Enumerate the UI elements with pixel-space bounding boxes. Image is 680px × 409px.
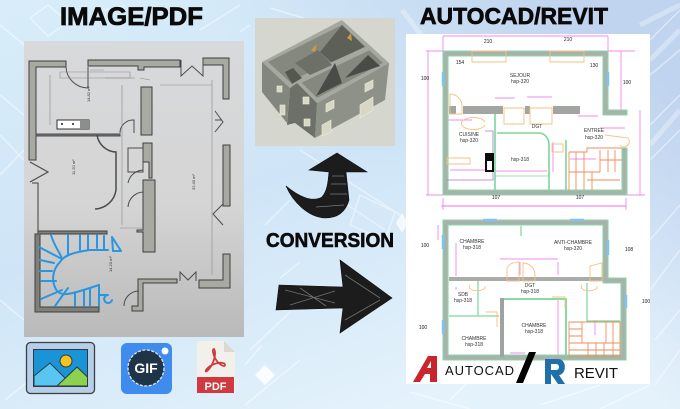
first floor room labels: hsp-318 [521, 289, 539, 295]
first floor room labels: CHAMBRE [459, 239, 485, 245]
ground floor plan [421, 36, 645, 210]
interior partitions and door swings [30, 60, 223, 306]
logo: AutoCAD: AUTOCAD [445, 363, 514, 378]
first floor dimensions text: 100 [421, 243, 429, 249]
ground floor dimensions text: 107 [492, 195, 500, 201]
first floor stairs [569, 322, 620, 356]
first floor dimensions text [419, 243, 650, 331]
logo: AutoCAD [413, 356, 514, 382]
ground floor dimensions text: 130 [590, 63, 598, 69]
icon: image file [26, 342, 94, 394]
divider slash [516, 352, 536, 383]
first floor room labels: DGT [525, 283, 535, 289]
first floor room labels: hsp-318 [525, 329, 543, 335]
windows and doors [277, 80, 373, 136]
ground floor partitions [449, 106, 580, 190]
plan labels: 32.40 m² [191, 174, 196, 190]
house right facade [315, 63, 389, 138]
first floor room labels: hsp-318 [463, 245, 481, 251]
ground floor stairs [569, 148, 622, 190]
first floor room labels: ANTI-CHAMBRE [554, 240, 593, 246]
ground floor room labels: CUISINE [459, 132, 480, 138]
plan labels: 14.20 m² [108, 256, 113, 272]
title: AUTOCAD/REVIT: AUTOCAD/REVIT [420, 3, 608, 29]
arrow: curved up arrow [286, 153, 367, 218]
kitchen sink [57, 120, 89, 129]
first floor dimensions text: 100 [419, 325, 427, 331]
first floor dimensions text: 100 [642, 299, 650, 305]
blue hand-drawn staircase [39, 235, 121, 306]
panel: 3D house model [255, 18, 395, 146]
ground floor dimensions text: 100 [421, 76, 429, 82]
ground floor dimension lines [426, 36, 645, 210]
ground floor room labels: ENTREE [584, 128, 605, 134]
icon: PDF file: PDF [204, 381, 227, 393]
plan labels: 11.20 m² [71, 159, 76, 175]
house top of walls [262, 20, 389, 103]
first floor room labels: hsp-318 [454, 298, 472, 304]
first floor partitions [449, 226, 620, 357]
first floor room labels [454, 239, 593, 348]
house interior rooms [268, 25, 383, 98]
logo: Revit: REVIT [574, 365, 618, 382]
plan labels [71, 86, 196, 272]
ground floor dimensions text: 154 [456, 60, 464, 66]
ground floor dimensions text: 210 [564, 37, 572, 43]
first floor room labels: SDB [458, 292, 469, 298]
icon: GIF file [121, 343, 172, 394]
first floor dimensions text: 108 [625, 247, 633, 253]
plan labels: 14.82 m² [86, 86, 91, 102]
ground floor room labels: hsp-318 [511, 157, 529, 163]
panel: CAD drawings sheet [406, 34, 650, 384]
first floor room labels: hsp-318 [465, 342, 483, 348]
outer walls of hand-marked plan [29, 58, 230, 312]
ground floor walls [443, 51, 627, 195]
ground floor dimensions text [421, 37, 631, 201]
ground floor dimensions text: 107 [576, 195, 584, 201]
first floor room labels: CHAMBRE [461, 336, 487, 342]
arrow: right arrow [276, 260, 392, 333]
ground floor room labels: hsp-320 [585, 135, 603, 141]
title: IMAGE/PDF: IMAGE/PDF [60, 3, 203, 31]
first floor room labels: hsp-320 [564, 246, 582, 252]
label: CONVERSION: CONVERSION [266, 230, 394, 252]
ground floor dimensions text: 210 [484, 39, 492, 45]
icon: PDF file [197, 341, 235, 393]
first floor doors and windows [469, 262, 602, 327]
ground floor room labels: SEJOUR [510, 73, 531, 79]
house left facade [262, 62, 290, 123]
first floor plan [419, 206, 650, 360]
first floor walls [443, 220, 626, 360]
ground floor room labels: hsp-320 [511, 79, 529, 85]
kitchen counter [447, 131, 494, 180]
panel: scanned floor plan photo [24, 41, 244, 337]
first floor room labels: CHAMBRE [521, 323, 547, 329]
icon: GIF file: GIF [134, 360, 158, 376]
ground floor dimensions text: 100 [623, 80, 631, 86]
ground floor room labels: hsp-320 [460, 138, 478, 144]
ground floor room labels: DGT [532, 124, 542, 130]
logo: Revit [545, 359, 618, 384]
first floor dimension lines [438, 206, 626, 355]
house front bump [287, 83, 317, 138]
ground floor doors and windows [447, 51, 629, 164]
ground floor room labels [459, 73, 605, 163]
